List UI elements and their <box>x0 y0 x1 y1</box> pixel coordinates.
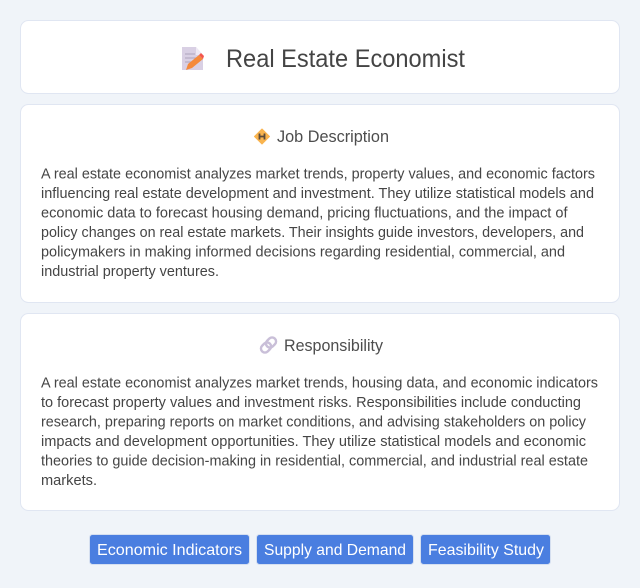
title: Real Estate Economist <box>226 45 465 73</box>
text block: job description: policy changes on real estate markets. Their insights guide investors, developers, and <box>41 225 584 241</box>
tag: supply and demand: Supply and Demand <box>264 542 406 559</box>
icon: orange diamond sign <box>254 129 270 144</box>
tag: supply and demand <box>256 534 414 564</box>
text block: job description: A real estate economist analyzes market trends, property values, and economic factors <box>41 167 595 183</box>
text block: job description: policymakers in making informed decisions regarding residential, commercial, and <box>41 245 565 261</box>
panel: responsibility <box>20 314 620 510</box>
text block: responsibility: A real estate economist analyzes market trends, housing data, and economic indicators <box>41 376 598 392</box>
tag: feasibility study: Feasibility Study <box>428 542 544 559</box>
text block: responsibility: impacts and development opportunities. They utilize statistical models and economic <box>41 434 586 450</box>
icon: document with pencil <box>182 47 204 70</box>
heading: responsibility: Responsibility <box>284 337 384 355</box>
tag: feasibility study <box>420 534 550 564</box>
tag: economic indicators: Economic Indicators <box>97 542 242 559</box>
text block: responsibility: research, preparing reports on market conditions, and advising stakeholders on policy <box>41 415 587 431</box>
text block: responsibility: theories to guide decision-making in residential, commercial, and industrial real estate <box>41 454 588 470</box>
text block: job description: influencing real estate development and investment. They utilize statistical models and <box>41 186 594 202</box>
icon: chain link <box>259 336 278 354</box>
text block: job description <box>41 167 595 280</box>
text block: responsibility: markets. <box>41 473 97 489</box>
panel: title card <box>20 20 620 94</box>
text block: job description: industrial property ventures. <box>41 264 219 280</box>
tag: economic indicators <box>90 534 250 564</box>
heading: job description: Job Description <box>277 128 389 146</box>
text block: responsibility: to forecast property values and investment risks. Responsibilities include conducting <box>41 395 581 411</box>
panel: job description <box>20 104 620 302</box>
text block: job description: economic data to forecast housing demand, pricing fluctuations, and the impact of <box>41 206 568 222</box>
text block: responsibility <box>41 376 598 489</box>
